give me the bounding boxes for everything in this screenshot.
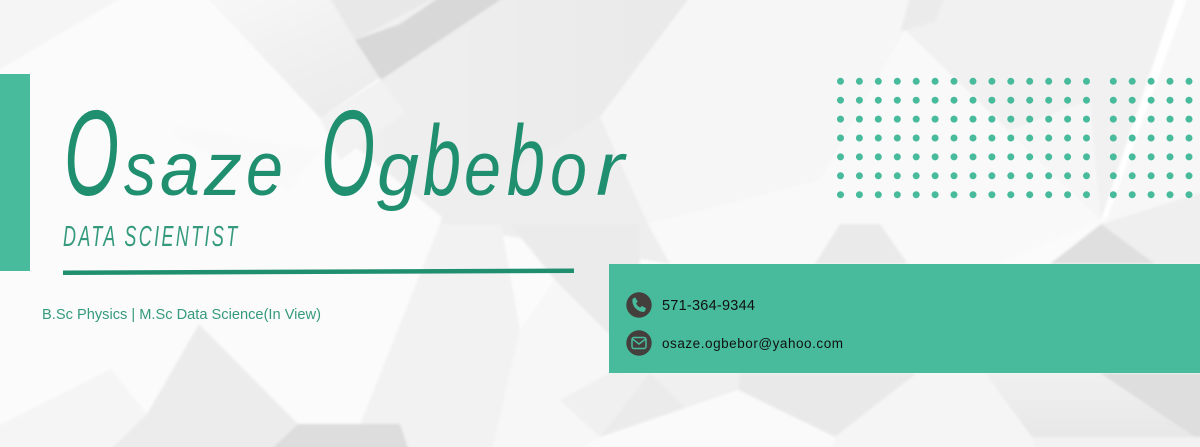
title: name: r xyxy=(596,127,627,212)
education line: B.Sc Physics | M.Sc Data Science(In View) xyxy=(42,307,321,323)
icon: mail xyxy=(626,330,652,356)
email address: osaze.ogbebor@yahoo.com xyxy=(662,336,843,351)
title: name: O xyxy=(321,85,375,221)
title: name: b xyxy=(423,105,461,217)
contact panel xyxy=(609,264,1200,373)
title: name: s xyxy=(124,127,156,212)
phone number: 571-364-9344 xyxy=(662,298,755,314)
title: name: O xyxy=(64,85,119,221)
dot grid decoration xyxy=(837,78,1192,198)
title: name: o xyxy=(550,127,587,212)
subtitle: job title: DATA SCIENTIST xyxy=(63,221,239,253)
title: name: b xyxy=(507,105,545,217)
title: name: e xyxy=(246,127,283,212)
title: name: e xyxy=(464,127,501,212)
title: name: g xyxy=(377,127,419,212)
accent bar left xyxy=(0,74,30,271)
title: name: z xyxy=(203,127,242,212)
icon: phone xyxy=(626,292,652,318)
divider line under subtitle xyxy=(63,268,574,275)
title: name: a xyxy=(160,127,200,212)
